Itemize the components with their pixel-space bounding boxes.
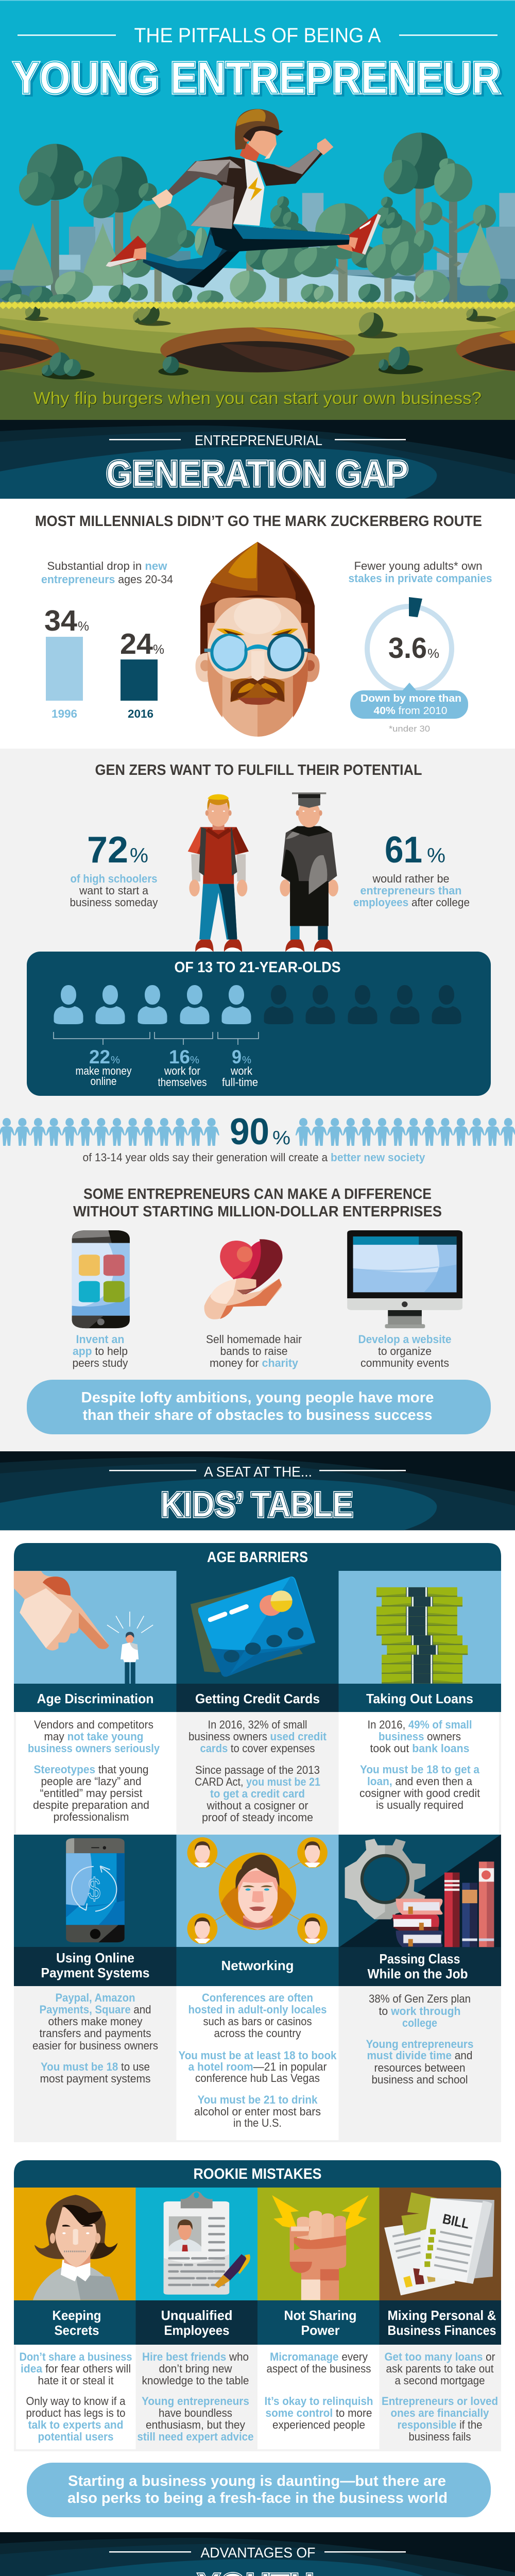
stat: 61 percent entrepreneurs: employees after college <box>353 896 470 909</box>
callout: down by more than 40 percent <box>350 683 468 734</box>
text block: mixing finances: responsible if the <box>398 2418 482 2431</box>
text block: keeping secrets: idea for fear others will <box>21 2362 131 2375</box>
tagline: Why flip burgers when you can start your own business? <box>33 388 482 408</box>
text block: unqualified employees: still need expert advice <box>137 2430 253 2443</box>
stat: work full-time: 9 <box>232 1046 242 1067</box>
panel heading: OF 13 TO 21-YEAR-OLDS <box>174 959 341 976</box>
stat: 72 percent high schoolers: business someday <box>70 896 158 909</box>
callout: down by more than 40 percent: 40% from 2010 <box>374 705 447 717</box>
text block: credit cards: cards to cover expenses <box>200 1742 315 1755</box>
text block: payment systems: easier for business owners <box>32 2039 158 2052</box>
text block: age discrimination: despite preparation and <box>33 1799 149 1811</box>
text block: age discrimination: “entitled” may persist <box>40 1787 142 1800</box>
text block: age discrimination: Vendors and competitors <box>34 1718 153 1731</box>
callout pill: starting a business young <box>27 2463 491 2517</box>
icon: woman with zipped mouth <box>33 2195 119 2300</box>
text: stakes in private companies <box>348 560 492 585</box>
text block: loans: In 2016, 49% of small <box>368 1718 472 1731</box>
tile titles: row one: Getting Credit Cards <box>195 1691 320 1706</box>
tile backgrounds <box>14 2188 501 2449</box>
text: sell hair bands: Sell homemade hair <box>206 1333 302 1346</box>
text block: networking: Conferences are often <box>202 1991 313 2004</box>
text: develop a website: Develop a website <box>358 1333 451 1346</box>
text block: passing class: business and school <box>372 2073 468 2086</box>
text block: not sharing power: aspect of the business <box>267 2362 371 2375</box>
section background: millennials <box>0 499 515 749</box>
text block: loans: You must be 18 to get a <box>360 1763 480 1776</box>
donut chart: 3.6 percent: 3.6 <box>388 632 427 665</box>
text block: networking: You must be 21 to drink <box>198 2093 318 2106</box>
icon: dollar sign on phone: $ <box>88 1872 100 1906</box>
panel heading: AGE BARRIERS <box>207 1549 308 1566</box>
hero running entrepreneur <box>106 109 381 287</box>
text block: passing class: Young entrepreneurs <box>366 2038 474 2050</box>
text block: credit cards <box>188 1718 327 1824</box>
panel: age barriers <box>14 1543 501 2142</box>
hero background <box>0 0 515 309</box>
panel: rookie mistakes <box>14 2160 501 2451</box>
text block: age discrimination: business owners seriously <box>28 1742 160 1755</box>
heading: gen zers: GEN ZERS WANT TO FULFILL THEIR POTENTIAL <box>95 762 422 778</box>
text block: keeping secrets: talk to experts and <box>28 2418 124 2431</box>
donut chart: 3.6 percent: % <box>427 647 439 661</box>
tile titles: Unqualified <box>161 2308 233 2323</box>
tile titles: Secrets <box>55 2323 99 2338</box>
tile titles: Keeping <box>53 2308 101 2323</box>
section header: kids' table <box>0 1451 515 1530</box>
illustration: older man with glasses <box>195 542 320 737</box>
text: sell hair bands: money for charity <box>210 1357 299 1369</box>
section header: advantages of youth: ADVANTAGES OF <box>201 2545 315 2561</box>
section header: advantages of youth <box>0 2532 515 2576</box>
text block: loans: cosigner with good credit <box>359 1787 480 1800</box>
text: sell hair bands <box>206 1333 302 1369</box>
text block: not sharing power: some control to more <box>266 2406 372 2419</box>
pictogram: ten people <box>54 985 461 1024</box>
text block: not sharing power <box>265 2350 373 2431</box>
text block: passing class: to work through <box>379 2005 460 2018</box>
text block: mixing finances: ask parents to take out <box>386 2362 493 2375</box>
stat: 90 percent better society: of 13-14 year olds say their generation will create a better new society <box>82 1151 425 1164</box>
icon: stack of cash <box>376 1587 468 1684</box>
pictogram: chain of children right <box>296 1118 515 1146</box>
text: invent an app: peers study <box>72 1357 128 1369</box>
text block: unqualified employees: enthusiasm, but they <box>146 2418 245 2431</box>
stat: work full-time: full-time <box>222 1076 258 1089</box>
icon: smartphone with apps <box>72 1230 130 1328</box>
text block: payment systems: transfers and payments <box>39 2027 151 2040</box>
callout pill: lofty ambitions: than their share of obstacles to business success <box>82 1407 433 1423</box>
text block: networking: a hotel room—21 in popular <box>188 2060 327 2073</box>
section header: generation gap: ENTREPRENEURIAL <box>195 432 322 448</box>
text block: passing class: college <box>402 2016 437 2029</box>
tile backgrounds <box>14 1571 501 1835</box>
tile titles: Not Sharing <box>284 2308 356 2323</box>
tile titles: row two: Passing Class <box>379 1951 460 1967</box>
hero title eyebrow: THE PITFALLS OF BEING A <box>134 24 381 47</box>
text block: loans: is usually required <box>376 1799 464 1811</box>
stat: work full-time: % <box>242 1055 251 1066</box>
text block: unqualified employees: knowledge to the table <box>142 2374 249 2387</box>
text block: not sharing power: experienced people <box>272 2418 365 2431</box>
text block: credit cards: business owners used credit <box>188 1730 327 1743</box>
tile titles: row two: Using Online <box>56 1950 134 1965</box>
donut chart: 3.6 percent <box>367 597 452 691</box>
stat: work for themselves <box>158 1046 207 1089</box>
panel heading: ROOKIE MISTAKES <box>194 2166 321 2182</box>
tile titles: row two: While on the Job <box>368 1966 468 1981</box>
text block: unqualified employees: don’t bring new <box>159 2362 232 2375</box>
icon: bills and paperwork <box>384 2192 494 2295</box>
stat: work full-time: work <box>230 1064 253 1077</box>
tile titles: Employees <box>164 2323 230 2338</box>
text block: credit cards: Since passage of the 2013 <box>195 1764 320 1776</box>
text block: keeping secrets: potential users <box>38 2430 113 2443</box>
bar chart: 1996 vs 2016: 24 <box>120 628 153 660</box>
text block: mixing finances: ones are financially <box>390 2406 489 2419</box>
tile titles: row two <box>41 1950 468 1981</box>
heading: millennials: MOST MILLENNIALS DIDN’T GO THE MARK ZUCKERBERG ROUTE <box>35 513 482 530</box>
text: new entrepreneurs drop <box>41 560 173 586</box>
text block: networking: in the U.S. <box>233 2116 282 2129</box>
icon: credit card <box>191 1577 315 1677</box>
tile titles: Business Finances <box>387 2323 496 2338</box>
hero scenery: city and trees <box>0 132 515 306</box>
text: develop a website <box>358 1333 451 1369</box>
text block: keeping secrets <box>20 2350 132 2443</box>
bar chart: 1996 vs 2016: % <box>78 619 89 634</box>
text block: networking: hosted in adult-only locales <box>188 2003 327 2016</box>
heading: make a difference: SOME ENTREPRENEURS CAN MAKE A DIFFERENCE <box>83 1186 432 1202</box>
stat: work for themselves: work for <box>164 1064 200 1077</box>
text block: keeping secrets: hate it or steal it <box>38 2374 113 2387</box>
text block: mixing finances: Get too many loans or <box>384 2350 495 2363</box>
text block: credit cards: proof of steady income <box>202 1811 313 1824</box>
text block: unqualified employees: Hire best friends who <box>142 2350 249 2363</box>
bar chart: 1996 vs 2016: 34 <box>44 604 77 637</box>
text block: unqualified employees: Young entrepreneurs <box>142 2395 249 2408</box>
tile titles: row two: Payment Systems <box>41 1965 149 1980</box>
section header: kids' table: KIDS’ TABLE <box>161 1485 353 1524</box>
text block: unqualified employees: have boundless <box>159 2406 232 2419</box>
tile titles: row two: Networking <box>221 1958 294 1973</box>
illustration: student <box>188 794 249 952</box>
text block: payment systems: Payments, Square and <box>39 2003 151 2016</box>
text: develop a website: community events <box>360 1357 449 1369</box>
text block: not sharing power: Micromanage every <box>270 2350 368 2363</box>
text: new entrepreneurs drop: Substantial drop in new <box>47 560 167 572</box>
icon label: BILL: BILL <box>441 2211 471 2232</box>
icon: heart in hand <box>204 1239 283 1319</box>
section header: generation gap <box>0 420 515 499</box>
heading: make a difference: WITHOUT STARTING MILLION-DOLLAR ENTERPRISES <box>73 1204 442 1220</box>
stat: 72 percent high schoolers: 72 <box>87 829 128 871</box>
icon: resume on clipboard <box>164 2192 250 2295</box>
text: stakes in private companies: Fewer young adults* own <box>354 560 482 572</box>
callout: down by more than 40 percent: Down by more than <box>360 693 461 704</box>
text block: networking: conference hub Las Vegas <box>195 2072 320 2084</box>
callout pill: starting a business young: Starting a business young is daunting—but there are <box>68 2473 446 2489</box>
callout pill: lofty ambitions <box>27 1380 491 1434</box>
bar chart: 1996 vs 2016: 2016 <box>128 707 153 720</box>
section header: generation gap: GENERATION GAP <box>106 454 408 495</box>
panel: of 13 to 21 year olds <box>27 952 491 1096</box>
text block: networking: such as bars or casinos <box>203 2015 312 2028</box>
text block: passing class: resources between <box>374 2061 466 2074</box>
text block: age discrimination: people are “lazy” and <box>41 1775 141 1788</box>
text block: age discrimination: may not take young <box>44 1730 143 1743</box>
stat: work for themselves: themselves <box>158 1076 207 1089</box>
stat: make money online: make money <box>75 1064 132 1077</box>
stat: work for themselves: % <box>190 1055 199 1066</box>
text block: age discrimination: professionalism <box>54 1810 129 1823</box>
text block: payment systems: Paypal, Amazon <box>56 1991 135 2004</box>
text block: age discrimination: Stereotypes that young <box>34 1763 148 1776</box>
text block: loans <box>359 1718 480 1811</box>
text block: loans: took out bank loans <box>370 1742 470 1755</box>
section header: generation gap: GENERATION GAP <box>106 454 408 495</box>
text block: keeping secrets: product has legs is to <box>26 2406 126 2419</box>
stat: 72 percent high schoolers <box>70 829 158 909</box>
grass bushes <box>25 302 496 380</box>
tile backgrounds row two <box>14 1835 501 2140</box>
text block: age discrimination <box>28 1718 160 1823</box>
callout pill: lofty ambitions: Despite lofty ambitions, young people have more <box>81 1389 434 1406</box>
text block: credit cards: CARD Act, you must be 21 <box>195 1775 320 1788</box>
text block: passing class <box>366 1992 474 2086</box>
tile titles <box>53 2308 496 2338</box>
pictogram: chain of children left <box>0 1118 219 1146</box>
text block: unqualified employees <box>137 2350 253 2443</box>
text block: payment systems: most payment systems <box>40 2072 150 2085</box>
tile titles: row one: Age Discrimination <box>37 1691 153 1706</box>
text: develop a website: to organize <box>378 1345 432 1358</box>
text block: networking: You must be at least 18 to book <box>178 2049 337 2062</box>
tile titles: row one <box>37 1691 473 1706</box>
stat: 61 percent entrepreneurs: 61 <box>385 829 422 871</box>
tagline: Why flip burgers when you can start your own business? <box>34 389 482 408</box>
stat: make money online: online <box>91 1075 116 1088</box>
grass field with pits <box>0 302 515 420</box>
stat: work for themselves: 16 <box>169 1046 190 1067</box>
text: invent an app: Invent an <box>76 1333 125 1346</box>
stat: 61 percent entrepreneurs: entrepreneurs than <box>360 884 461 897</box>
stat: work full-time <box>222 1046 258 1089</box>
text: stakes in private companies: stakes in private companies <box>348 572 492 585</box>
stat: make money online: 22 <box>89 1046 110 1067</box>
text block: credit cards: to get a credit card <box>210 1787 305 1800</box>
text: new entrepreneurs drop: entrepreneurs ages 20-34 <box>41 573 173 586</box>
section header: kids' table: KIDS’ TABLE <box>161 1485 353 1524</box>
callout: down by more than 40 percent: *under 30 <box>389 724 430 734</box>
text block: networking <box>178 1991 337 2129</box>
text: sell hair bands: bands to raise <box>220 1345 287 1358</box>
section header: kids' table: A SEAT AT THE... <box>204 1464 312 1480</box>
stat: 72 percent high schoolers: % <box>130 844 148 867</box>
text block: mixing finances: business fails <box>409 2430 471 2443</box>
stat: 61 percent entrepreneurs: would rather be <box>372 872 449 885</box>
text block: mixing finances: a second mortgage <box>394 2374 485 2387</box>
text block: networking: alcohol or enter most bars <box>194 2105 321 2118</box>
callout pill: starting a business young: also perks to being a fresh-face in the business world <box>67 2490 448 2506</box>
text block: credit cards: In 2016, 32% of small <box>208 1718 307 1731</box>
text block: payment systems <box>32 1991 158 2085</box>
icon: raised fist with lightning <box>272 2195 369 2300</box>
stat: 61 percent entrepreneurs: % <box>427 844 445 867</box>
stat: 90 percent better society: 90 <box>230 1111 269 1153</box>
bar chart: 1996 vs 2016: 1996 <box>52 707 77 720</box>
text block: mixing finances: Entrepreneurs or loved <box>382 2395 498 2408</box>
icon: mobile payment phone <box>66 1838 125 1942</box>
text block: loans: business owners <box>379 1730 461 1743</box>
text block: passing class: must divide time and <box>367 2049 473 2062</box>
tile titles: Mixing Personal & <box>387 2308 496 2323</box>
text block: networking: across the country <box>214 2027 301 2040</box>
text block: not sharing power: It’s okay to relinquish <box>265 2395 373 2408</box>
icon: network of people <box>187 1837 328 1944</box>
illustration: graduate <box>280 792 338 952</box>
text block: payment systems: You must be 18 to use <box>41 2060 150 2073</box>
text: invent an app: app to help <box>73 1345 128 1358</box>
text block: payment systems: others make money <box>48 2015 142 2028</box>
icon: desktop monitor <box>347 1230 462 1328</box>
icon: gear and books <box>339 1835 501 1947</box>
text: invent an app <box>72 1333 128 1369</box>
tile titles: Power <box>301 2323 340 2338</box>
text block: passing class: 38% of Gen Zers plan <box>369 1992 471 2005</box>
text block: credit cards: without a cosigner or <box>207 1799 308 1812</box>
text block: loans: loan, and even then a <box>367 1775 473 1788</box>
stat: 61 percent entrepreneurs <box>353 829 470 909</box>
zigzag grass edge <box>0 301 515 309</box>
text block: keeping secrets: Only way to know if a <box>26 2395 126 2408</box>
stat: make money online: % <box>111 1055 120 1066</box>
icon: giant hand pointing at small man <box>14 1571 153 1684</box>
stat: 90 percent better society <box>82 1111 425 1164</box>
text block: mixing finances <box>382 2350 498 2443</box>
stat: 90 percent better society: % <box>272 1127 290 1149</box>
heading: make a difference <box>73 1186 442 1220</box>
bar chart: 1996 vs 2016: % <box>153 642 164 657</box>
tile titles: row one: Taking Out Loans <box>366 1691 473 1706</box>
text block: keeping secrets: Don’t share a business <box>20 2350 132 2363</box>
stat: make money online <box>75 1046 132 1088</box>
stat: 72 percent high schoolers: of high schoolers <box>70 872 158 885</box>
bar chart: 1996 vs 2016 <box>44 604 164 720</box>
stat: 72 percent high schoolers: want to start a <box>79 884 149 897</box>
section background: gen z <box>0 749 515 1451</box>
